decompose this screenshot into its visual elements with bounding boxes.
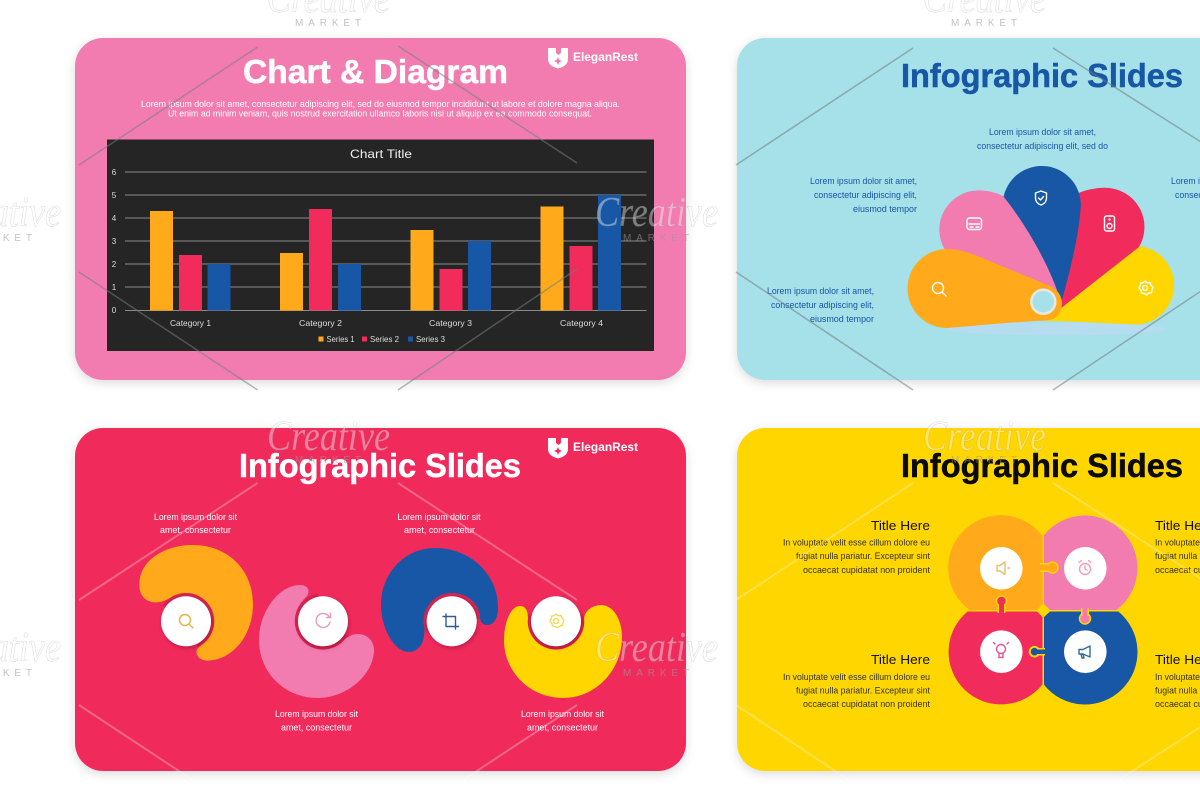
text block: description: [141, 99, 620, 118]
text block: right upper: [1171, 176, 1200, 200]
text block: top left: Title Here: [871, 518, 930, 533]
legend: Series 3: [416, 334, 445, 344]
puzzle tab: orange into pink: [1040, 562, 1058, 573]
text block: left lower: consectetur adipiscing elit,: [771, 300, 874, 310]
y axis labels: 5: [112, 191, 117, 200]
y axis labels: 6: [112, 168, 117, 177]
puzzle tab: red into orange: [996, 596, 1006, 613]
y axis labels: 0: [112, 306, 117, 315]
heading: infographic slides black: Infographic Slides: [901, 447, 1183, 484]
category labels: Category 2: [299, 318, 342, 328]
heading: infographic slides blue: Infographic Slides: [901, 57, 1183, 94]
panel: chart and diagram: [75, 38, 686, 380]
text block: top left: [783, 518, 930, 575]
watermark logos: Creative: [923, 414, 1046, 460]
crescent: orange with search icon: [139, 545, 253, 661]
crescent: blue with crop icon: [381, 548, 498, 652]
text block: top left: In voluptate velit esse cillum dolore eu: [783, 538, 930, 548]
text block: left upper: Lorem ipsum dolor sit amet,: [810, 176, 917, 186]
bar chart: [107, 140, 654, 351]
panel: puzzle infographic: [737, 428, 1200, 771]
series 1 bars: [150, 206, 564, 310]
puzzle tab: pink into blue: [1080, 608, 1090, 624]
legend: [318, 334, 445, 344]
text block: top: consectetur adipiscing elit, sed do: [977, 141, 1108, 151]
watermark logos: MARKET: [951, 18, 1017, 29]
heading: infographic slides white: Infographic Slides: [239, 447, 521, 484]
text block: top: Lorem ipsum dolor sit amet,: [989, 127, 1096, 137]
text block: bottom left: In voluptate velit esse cillum dolore eu: [783, 672, 930, 682]
text block: top left: occaecat cupidatat non proident: [803, 565, 930, 575]
watermark logos: [0, 0, 1046, 679]
hub ring: [1031, 290, 1055, 314]
watermark lines top row: [79, 46, 1200, 390]
icon disc: megaphone: [1064, 630, 1107, 673]
category labels: Category 1: [170, 318, 211, 328]
text block: crescent 2: amet, consectetur: [281, 722, 352, 732]
text block: left upper: eiusmod tempor: [853, 204, 917, 214]
watermark logos: MARKET: [623, 668, 689, 679]
logo: EleganRest: [548, 438, 638, 458]
watermark logos: Creative: [595, 625, 718, 671]
logo: EleganRest: EleganRest: [573, 440, 638, 454]
watermark logos: MARKET: [951, 455, 1017, 466]
icon disc: speaker: [980, 547, 1023, 590]
text block: description: Ut enim ad minim veniam, quis nostrud exercitation ullamco laboris nisi ut aliquip ex ea commodo consequat.: [168, 108, 592, 118]
heading: chart and diagram: Chart & Diagram: [243, 53, 508, 90]
text block: left upper: consectetur adipiscing elit,: [814, 190, 917, 200]
text block: description: Lorem ipsum dolor sit amet, consectetur adipiscing elit, sed do eiusmod tempor incididunt ut labore et dolore magna aliqua.: [141, 99, 620, 109]
icon: card: [967, 218, 982, 230]
watermark logos: MARKET: [623, 233, 689, 244]
text block: bottom right: [1155, 652, 1200, 709]
series 2 bars: [179, 209, 592, 310]
category labels: Category 4: [560, 318, 603, 328]
legend: Series 2: [370, 334, 399, 344]
text block: crescent 1: amet, consectetur: [160, 525, 231, 535]
text block: left lower: Lorem ipsum dolor sit amet,: [767, 286, 874, 296]
category labels: [170, 318, 603, 328]
logo: EleganRest: [548, 48, 638, 68]
text block: bottom left: occaecat cupidatat non proident: [803, 699, 930, 709]
logo: EleganRest: EleganRest: [573, 50, 638, 64]
text block: crescent 3: Lorem ipsum dolor sit: [398, 512, 481, 522]
watermark logos: MARKET: [295, 18, 361, 29]
panel: crescent infographic: [75, 428, 686, 771]
puzzle diagram: [948, 515, 1137, 704]
watermark logos: MARKET: [295, 455, 361, 466]
text block: top right: [1155, 518, 1200, 575]
icon: speaker: [1104, 216, 1114, 231]
text block: crescent 1: [154, 512, 237, 535]
watermark logos: Creative: [595, 190, 718, 236]
category labels: Category 3: [429, 318, 472, 328]
text block: crescent 1: Lorem ipsum dolor sit: [154, 512, 237, 522]
text block: bottom left: Title Here: [871, 652, 930, 667]
icon disc: light bulb: [980, 630, 1023, 673]
watermark lines bottom row: [79, 483, 1200, 800]
y axis labels: [112, 168, 117, 315]
watermark logos: Creative: [267, 414, 390, 460]
text block: top: [977, 127, 1108, 151]
text block: bottom left: [783, 652, 930, 709]
puzzle tab: blue into red: [1030, 647, 1046, 656]
legend: Series 1: [326, 334, 355, 344]
icon: search: [932, 282, 946, 296]
y axis labels: 4: [112, 214, 117, 223]
y axis labels: 3: [112, 237, 117, 246]
text block: crescent 4: amet, consectetur: [527, 722, 598, 732]
text block: left upper: [810, 176, 917, 214]
crescent: yellow with gear icon: [504, 596, 622, 698]
icon disc: alarm clock: [1064, 547, 1107, 590]
text block: left lower: [767, 286, 874, 324]
y axis labels: 2: [112, 260, 117, 269]
text block: crescent 3: amet, consectetur: [404, 525, 475, 535]
series 3 bars: [208, 195, 621, 310]
chart title: Chart Title: [350, 147, 412, 161]
y axis labels: 1: [112, 283, 117, 292]
text block: crescent 2: [275, 709, 358, 732]
crescent: pink with refresh icon: [259, 585, 374, 698]
text block: bottom left: fugiat nulla pariatur. Excepteur sint: [796, 686, 930, 696]
text block: crescent 4: Lorem ipsum dolor sit: [521, 709, 604, 719]
text block: crescent 3: [398, 512, 481, 535]
fan diagram: [908, 166, 1174, 336]
text block: left lower: eiusmod tempor: [810, 314, 874, 324]
panel: fan infographic: [737, 38, 1200, 380]
text block: crescent 4: [521, 709, 604, 732]
text block: top left: fugiat nulla pariatur. Excepteur sint: [796, 551, 930, 561]
text block: crescent 2: Lorem ipsum dolor sit: [275, 709, 358, 719]
icon: shield: [1036, 191, 1046, 205]
icon: gear: [1139, 281, 1153, 295]
